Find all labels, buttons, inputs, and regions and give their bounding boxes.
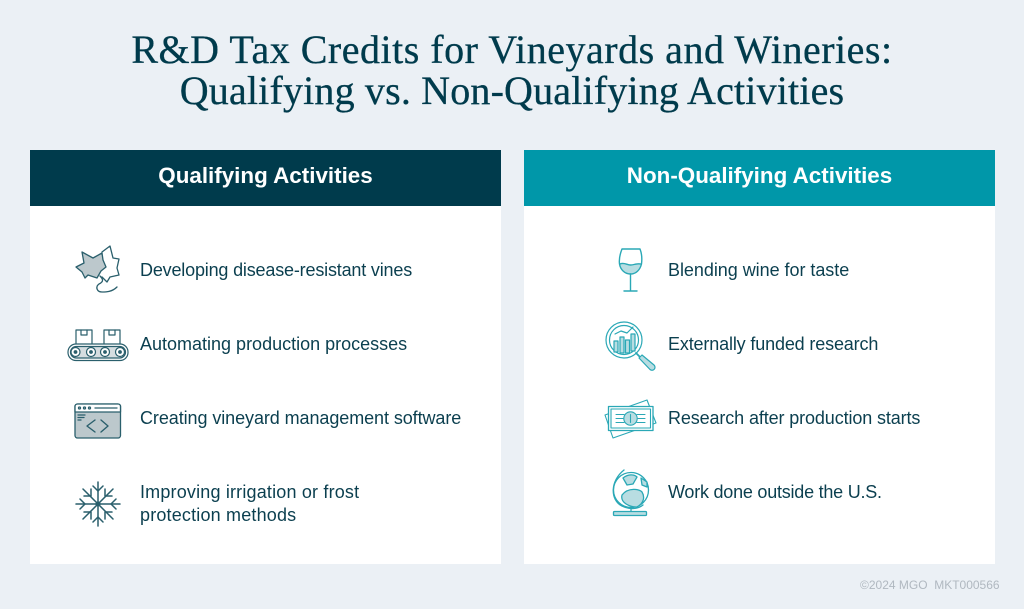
- copyright: ©2024 MGO MKT000566: [860, 578, 1000, 592]
- panel: non-qualifying activities: [524, 150, 995, 564]
- heading: qualifying activities: Qualifying Activities: [158, 163, 373, 188]
- text: irrigation or frost protection: [140, 482, 359, 525]
- title: [131, 27, 893, 113]
- heading: non-qualifying activities: [524, 150, 995, 206]
- panel: qualifying activities: [30, 150, 501, 564]
- text: work outside U.S.: Work done outside the U.S.: [668, 482, 882, 502]
- text: vineyard software: Creating vineyard management software: [140, 408, 461, 428]
- heading: non-qualifying activities: Non-Qualifying Activities: [627, 163, 892, 188]
- text: irrigation or frost protection: protection methods: [140, 505, 296, 525]
- text: blending wine: Blending wine for taste: [668, 260, 849, 280]
- text: disease-resistant vines: Developing disease-resistant vines: [140, 260, 412, 280]
- text: automating production: Automating production processes: [140, 334, 407, 354]
- heading: qualifying activities: [30, 150, 501, 206]
- text: research after production: Research after production starts: [668, 408, 920, 428]
- text: externally funded research: Externally funded research: [668, 334, 878, 354]
- text: irrigation or frost protection: Improving irrigation or frost: [140, 482, 359, 502]
- title: Qualifying vs. Non-Qualifying Activities: [180, 68, 844, 113]
- title: R&D Tax Credits for Vineyards and Wineries:: [131, 27, 893, 72]
